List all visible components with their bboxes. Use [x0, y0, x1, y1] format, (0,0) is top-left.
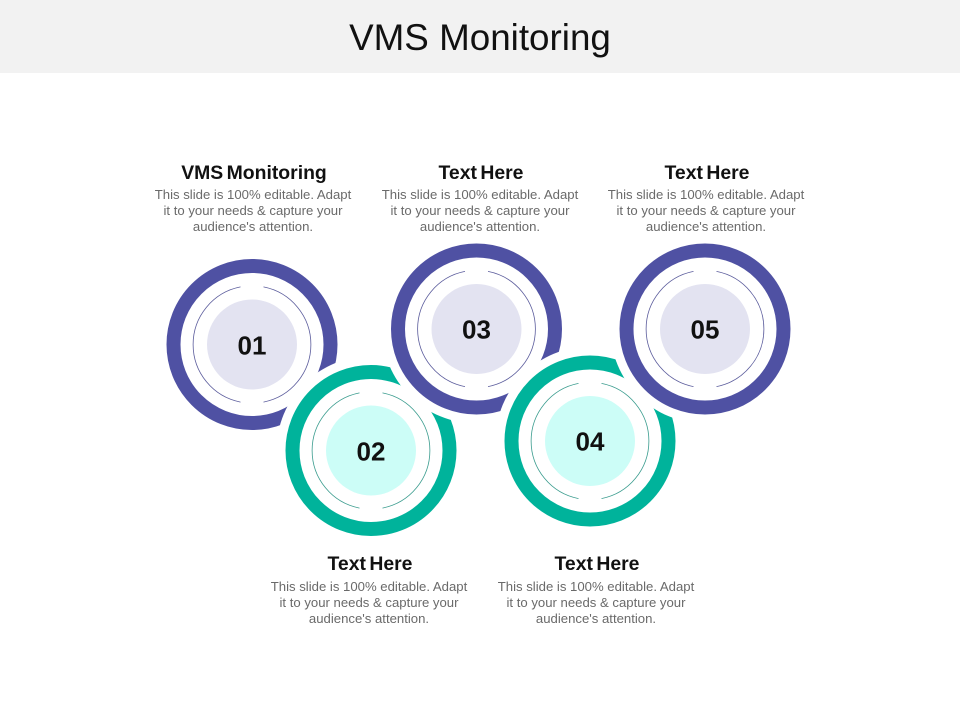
- text block: VMS Monitoring: it to your needs & capture your: [164, 203, 342, 218]
- text block: VMS Monitoring: [155, 162, 352, 234]
- text block: bottom right: audience's attention.: [536, 611, 656, 626]
- text block: VMS Monitoring: VMS Monitoring: [181, 162, 327, 184]
- ring 02: [276, 356, 466, 545]
- ring 01: [158, 250, 346, 439]
- ring 01: 01: [238, 330, 266, 360]
- text block: VMS Monitoring: This slide is 100% editable. Adapt: [155, 187, 351, 202]
- text block: top right: Text Here: [665, 162, 749, 184]
- text block: top middle: Text Here: [439, 162, 523, 184]
- text block: bottom right: This slide is 100% editable. Adapt: [498, 579, 694, 594]
- text block: top middle: [382, 162, 578, 234]
- text block: bottom right: it to your needs & capture your: [507, 595, 685, 610]
- ring 05: [610, 234, 800, 424]
- title: VMS Monitoring: [349, 17, 611, 58]
- text block: bottom left: it to your needs & capture your: [280, 595, 458, 610]
- text block: bottom left: [271, 553, 468, 626]
- ring 04: [496, 346, 684, 536]
- ring 03: 03: [462, 314, 491, 344]
- text block: bottom left: This slide is 100% editable. Adapt: [271, 579, 467, 594]
- text block: bottom left: Text Here: [328, 553, 412, 575]
- text block: top right: it to your needs & capture your: [617, 203, 795, 218]
- ring 04: 04: [576, 426, 605, 456]
- text block: bottom left: audience's attention.: [309, 611, 429, 626]
- text block: top middle: This slide is 100% editable. Adapt: [382, 187, 578, 202]
- text block: top right: audience's attention.: [646, 219, 766, 234]
- text block: top middle: it to your needs & capture your: [391, 203, 569, 218]
- ring 03: [382, 234, 571, 424]
- header band: [0, 0, 960, 73]
- text block: VMS Monitoring: audience's attention.: [193, 219, 313, 234]
- text block: top right: [608, 162, 804, 234]
- text block: bottom right: [498, 553, 694, 626]
- ring 02: 02: [357, 436, 385, 466]
- text block: bottom right: Text Here: [555, 553, 639, 575]
- text block: top right: This slide is 100% editable. Adapt: [608, 187, 804, 202]
- ring 05: 05: [691, 314, 719, 344]
- text block: top middle: audience's attention.: [420, 219, 540, 234]
